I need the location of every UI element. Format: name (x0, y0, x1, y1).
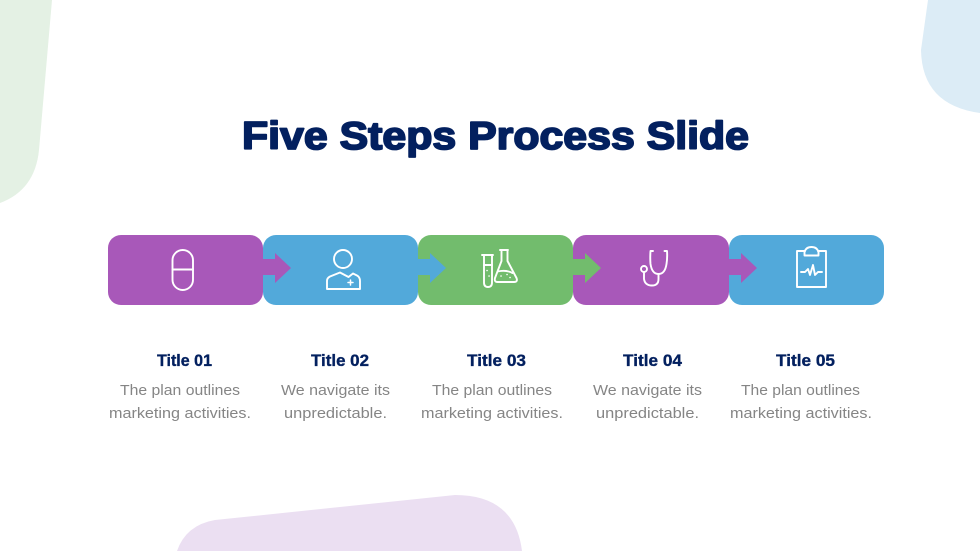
description 3: marketing activities. (421, 405, 563, 422)
title 01: Title 01 (157, 352, 212, 370)
step 5 text (730, 352, 872, 422)
title 02: Title 02 (311, 352, 369, 370)
step 4 text (593, 352, 702, 422)
icon: lab flasks (482, 250, 517, 287)
description 1: The plan outlines (120, 382, 240, 399)
step box 5 (729, 235, 884, 305)
arrow 3 (572, 253, 601, 283)
step box 3 (418, 235, 573, 305)
blob: bottom purple (177, 495, 522, 551)
icon: medical clipboard (797, 247, 826, 287)
description 3: The plan outlines (432, 382, 552, 399)
description 5: marketing activities. (730, 405, 872, 422)
arrow 2 (417, 253, 446, 283)
description 4: unpredictable. (596, 405, 699, 422)
description 2: We navigate its (281, 382, 390, 399)
icon: doctor (327, 250, 360, 289)
step 1 text (109, 352, 251, 422)
icon: pill (172, 250, 193, 290)
blob: top-left green (0, 0, 52, 203)
step box 4 (573, 235, 729, 305)
title 05: Title 05 (776, 352, 835, 370)
arrow 4 (728, 253, 757, 283)
description 2: unpredictable. (284, 405, 387, 422)
title 03: Title 03 (467, 352, 526, 370)
step 3 text (421, 352, 563, 422)
description 5: The plan outlines (741, 382, 860, 399)
description 4: We navigate its (593, 382, 702, 399)
icon: stethoscope (641, 251, 667, 286)
arrow 1 (262, 253, 291, 283)
title: Five Steps Process Slide (242, 115, 749, 158)
title 04: Title 04 (623, 352, 683, 370)
blob: top-right blue (921, 0, 980, 113)
step box 1 (108, 235, 263, 305)
process chain (108, 235, 884, 305)
description 1: marketing activities. (109, 405, 251, 422)
step box 2 (263, 235, 418, 305)
step 2 text (281, 352, 390, 422)
